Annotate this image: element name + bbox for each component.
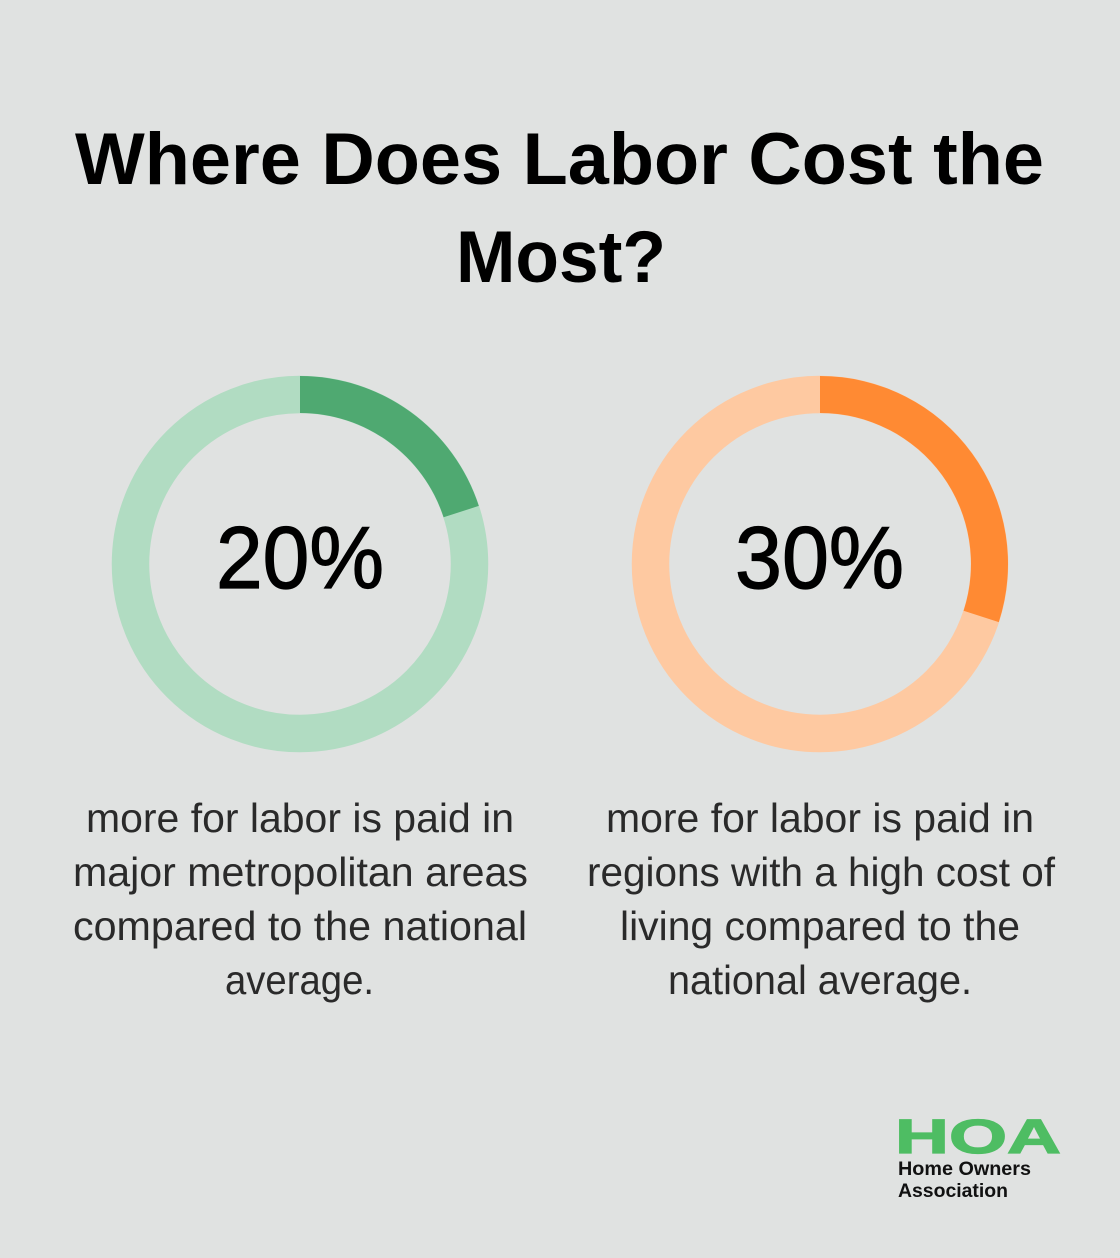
description: metropolitan areas: average. (225, 957, 374, 1003)
title (75, 119, 1044, 298)
panel: 20% metropolitan areas (73, 376, 528, 1003)
description: metropolitan areas: major metropolitan areas (73, 849, 528, 895)
stat value: 20%: 20% (216, 508, 384, 607)
description: high cost of living regions (587, 795, 1056, 1003)
donut chart: 20% (130, 376, 479, 734)
description: metropolitan areas: more for labor is paid in (86, 795, 514, 841)
logo: HOA Home Owners Association: Association (898, 1181, 1008, 1202)
description: metropolitan areas (73, 795, 528, 1003)
description: metropolitan areas: compared to the national (73, 903, 527, 949)
description: high cost of living regions: more for labor is paid in (606, 795, 1034, 841)
description: high cost of living regions: living compared to the (620, 903, 1020, 949)
title: Most? (456, 217, 666, 298)
donut chart: 30% (650, 376, 1008, 734)
logo: HOA Home Owners Association: HOA (895, 1111, 1061, 1164)
stat value: 30%: 30% (735, 508, 904, 607)
description: high cost of living regions: regions with a high cost of (587, 849, 1056, 895)
title: Where Does Labor Cost the (75, 119, 1044, 200)
logo: HOA Home Owners Association: Home Owners (898, 1159, 1031, 1180)
panel: 30% high cost of living regions (587, 376, 1056, 1003)
description: high cost of living regions: national average. (668, 957, 972, 1003)
logo: HOA Home Owners Association (895, 1111, 1061, 1202)
